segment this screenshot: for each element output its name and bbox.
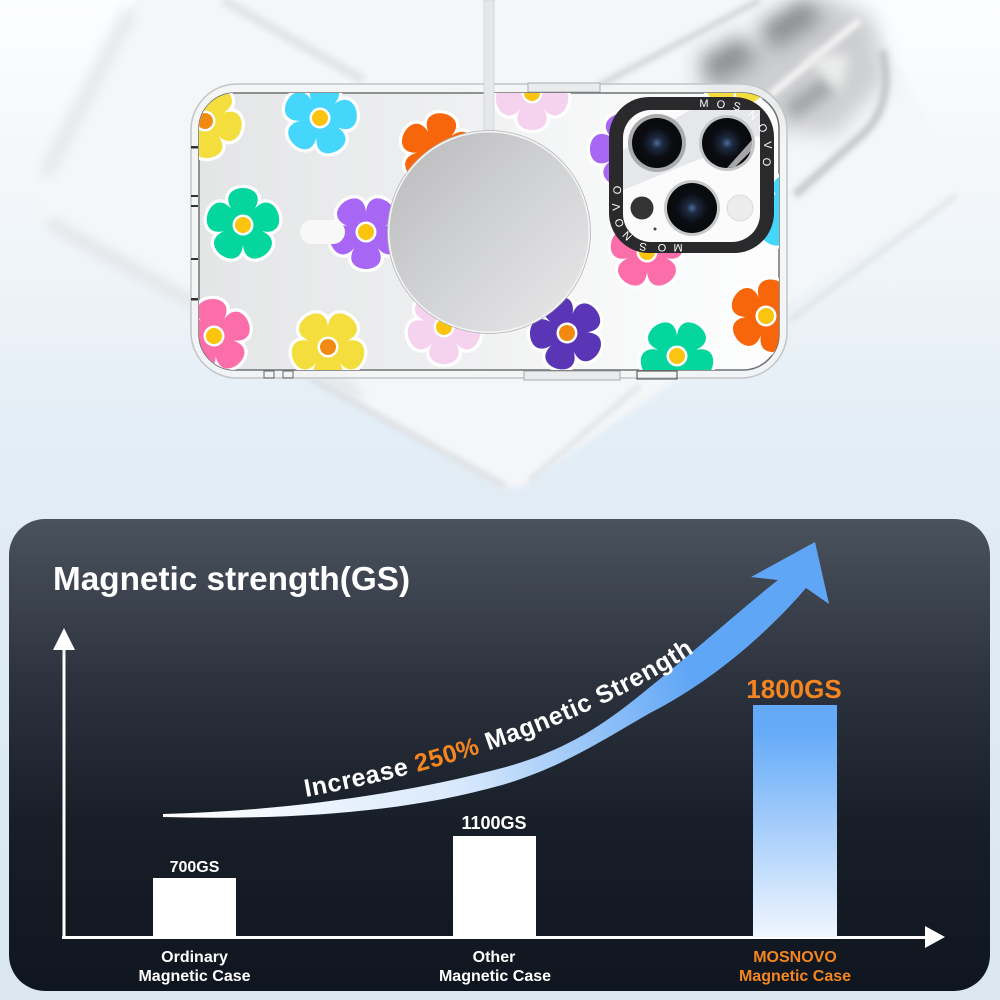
flash [727,195,753,221]
x axis [62,926,945,948]
lens bottom [664,180,720,236]
camera bumper [609,97,774,253]
bar: ordinary: Magnetic Case [138,968,251,985]
flower: pink under camera [610,234,682,286]
brand ring text bottom: N [621,228,635,242]
flower: pale pink top [494,93,572,133]
logo cutout [300,220,345,244]
bar: mosnovo: 1800GS [746,674,842,704]
flower: yellow top left [199,93,245,162]
brand ring text bottom: O [613,216,627,229]
brand ring text top: O [760,157,772,167]
blurred ghost phones [38,0,960,488]
bar: other [439,813,551,985]
bar: ordinary: Ordinary [161,949,228,966]
phone with clear case [190,0,788,380]
brand ring text top: S [732,100,742,114]
case bumper [191,84,787,378]
lidar [630,196,654,220]
bar: ordinary [138,859,251,985]
flower: orange [398,110,470,174]
bar: other: Magnetic Case [439,968,551,985]
brand ring text bottom [611,185,683,253]
magsafe charger disc [388,132,590,332]
brand ring text bottom: V [611,202,623,211]
lens top left [628,114,686,172]
brand ring text top: V [761,141,773,150]
curved label: Increase 250% Magnetic Strength [304,642,693,797]
bar: mosnovo: MOSNOVO [753,949,837,966]
brand ring text bottom: O [612,185,624,195]
back panel [199,93,779,370]
flower: blue right edge [764,174,779,249]
y axis [53,628,75,937]
bar: mosnovo: Magnetic Case [739,968,851,985]
flower: purple behind camera [587,114,616,184]
bar: other: Other [473,949,515,966]
brand ring text top: O [716,99,726,111]
flower: green [207,188,279,259]
flower: yellow bottom [292,313,364,384]
bar: ordinary: 700GS [170,859,220,876]
magsafe cable [484,0,494,136]
flower: orange right [732,278,779,356]
brand ring text top: N [745,109,759,123]
flower: green bottom right [639,322,715,370]
side buttons [264,83,677,380]
chart panel [9,519,990,991]
flower: deep purple [527,296,604,370]
brand ring text top: O [755,122,770,135]
flower: pale pink bottom [408,293,480,364]
microphone dot [654,228,656,230]
brand ring text top [699,98,773,167]
heading: Magnetic strength(GS) [53,561,410,598]
lens top right [699,115,755,171]
brand ring text bottom: O [657,241,666,253]
bar: other: 1100GS [461,813,527,833]
flower: sky blue [282,93,360,156]
bar: mosnovo [739,674,851,985]
flower: yellow top right [704,93,763,102]
flower pattern [199,93,779,370]
brand ring text top: M [699,98,709,110]
growth arrow [163,542,829,818]
brand ring text bottom: S [639,240,648,253]
flower: purple [330,198,402,269]
left edge switch marks [191,146,198,300]
flower: pink lower left [199,296,253,370]
brand ring text bottom: M [673,241,683,253]
